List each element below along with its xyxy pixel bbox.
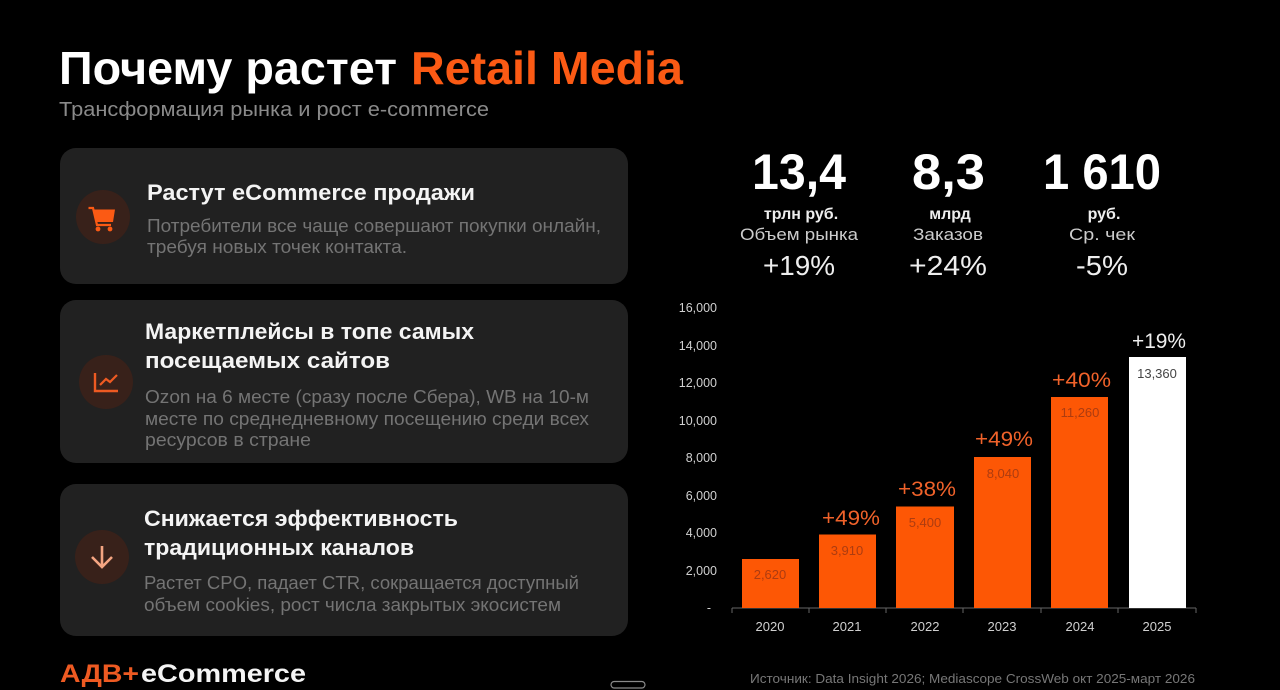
logo bbox=[60, 660, 306, 688]
icon: line chart bbox=[79, 355, 133, 409]
bar values: 8,040 bbox=[987, 466, 1019, 481]
text block: marketplaces: месте по среднедневному посещению среди всех bbox=[145, 409, 589, 429]
y axis labels: 6,000 bbox=[686, 489, 717, 503]
bar values: 13,360 bbox=[1137, 366, 1177, 381]
panel: eCommerce sales bbox=[60, 148, 628, 284]
x axis labels: 2024 bbox=[1066, 619, 1094, 634]
stat: average check: 1 610 bbox=[1043, 144, 1161, 200]
text block: marketplaces: Ozon на 6 месте (сразу после Сбера), WB на 10-м bbox=[145, 387, 589, 407]
y axis labels: 8,000 bbox=[686, 451, 717, 465]
growth labels: +49% bbox=[975, 428, 1033, 451]
stat: orders: 8,3 bbox=[912, 144, 985, 200]
bar chart bbox=[679, 301, 1196, 634]
text block: eCommerce sales: Потребители все чаще совершают покупки онлайн, bbox=[147, 216, 601, 236]
bar values: 2,620 bbox=[754, 567, 786, 582]
y axis labels: 14,000 bbox=[679, 339, 717, 353]
heading: marketplaces bbox=[145, 319, 475, 373]
text block: eCommerce sales: требуя новых точек контакта. bbox=[147, 237, 407, 257]
heading: traditional channels bbox=[144, 506, 458, 560]
bar values: 5,400 bbox=[909, 515, 941, 530]
small pill outline bbox=[611, 682, 645, 688]
stat: market volume: трлн руб. bbox=[764, 206, 838, 223]
stat: market volume: Объем рынка bbox=[740, 225, 859, 244]
logo: АДВ+ bbox=[60, 660, 139, 688]
text block: traditional channels: объем cookies, рост числа закрытых экосистем bbox=[144, 595, 561, 615]
bar values: 3,910 bbox=[831, 543, 863, 558]
stat: average check: Ср. чек bbox=[1069, 225, 1136, 244]
x axis labels: 2022 bbox=[911, 619, 939, 634]
heading: marketplaces: посещаемых сайтов bbox=[145, 348, 390, 373]
growth labels bbox=[822, 330, 1186, 530]
text block: traditional channels: Растет CPO, падает CTR, сокращается доступный bbox=[144, 573, 579, 593]
stat: market volume bbox=[740, 144, 859, 281]
stat: average check bbox=[1043, 144, 1161, 281]
stat: average check: руб. bbox=[1088, 206, 1120, 223]
logo: eCommerce bbox=[141, 660, 306, 688]
x axis labels bbox=[756, 619, 1171, 634]
panel: marketplaces bbox=[60, 300, 628, 463]
stat: orders bbox=[909, 144, 987, 281]
icon: shopping cart bbox=[76, 190, 130, 244]
y axis labels: 10,000 bbox=[679, 414, 717, 428]
title bbox=[59, 42, 683, 94]
x axis labels: 2021 bbox=[833, 619, 861, 634]
x axis labels: 2023 bbox=[988, 619, 1016, 634]
text block: traditional channels bbox=[144, 573, 579, 615]
growth labels: +40% bbox=[1052, 369, 1111, 392]
panel: traditional channels bbox=[60, 484, 628, 636]
stat: orders: +24% bbox=[909, 250, 987, 281]
title: Почему растет bbox=[59, 42, 397, 94]
growth labels: +38% bbox=[898, 478, 956, 501]
heading: traditional channels: Снижается эффективность bbox=[144, 506, 458, 531]
source note: Источник: Data Insight 2026; Mediascope CrossWeb окт 2025-март 2026 bbox=[750, 672, 1195, 686]
growth labels: +19% bbox=[1132, 330, 1186, 353]
text block: eCommerce sales bbox=[147, 216, 601, 257]
heading: marketplaces: Маркетплейсы в топе самых bbox=[145, 319, 475, 344]
bars bbox=[742, 357, 1186, 608]
text block: marketplaces: ресурсов в стране bbox=[145, 430, 311, 450]
bar values bbox=[754, 366, 1177, 582]
x axis labels: 2020 bbox=[756, 619, 784, 634]
stat: market volume: +19% bbox=[763, 250, 835, 281]
stat: orders: Заказов bbox=[913, 225, 983, 244]
y axis labels: 12,000 bbox=[679, 376, 717, 390]
icon: down arrow bbox=[75, 530, 129, 584]
y axis labels: 4,000 bbox=[686, 526, 717, 540]
heading: traditional channels: традиционных каналов bbox=[144, 535, 414, 560]
y axis labels bbox=[679, 301, 717, 615]
heading: eCommerce sales: Растут eCommerce продажи bbox=[147, 180, 475, 205]
subtitle: Трансформация рынка и рост e-commerce bbox=[59, 99, 489, 121]
y axis labels: 2,000 bbox=[686, 564, 717, 578]
growth labels: +49% bbox=[822, 507, 880, 530]
stat: orders: млрд bbox=[929, 206, 971, 223]
stat: average check: -5% bbox=[1076, 250, 1128, 281]
y axis labels: 16,000 bbox=[679, 301, 717, 315]
text block: marketplaces bbox=[145, 387, 589, 450]
title: Retail Media bbox=[411, 42, 683, 94]
x axis labels: 2025 bbox=[1143, 619, 1171, 634]
y axis labels: - bbox=[707, 601, 711, 615]
bar values: 11,260 bbox=[1061, 405, 1099, 420]
stat: market volume: 13,4 bbox=[752, 144, 846, 200]
